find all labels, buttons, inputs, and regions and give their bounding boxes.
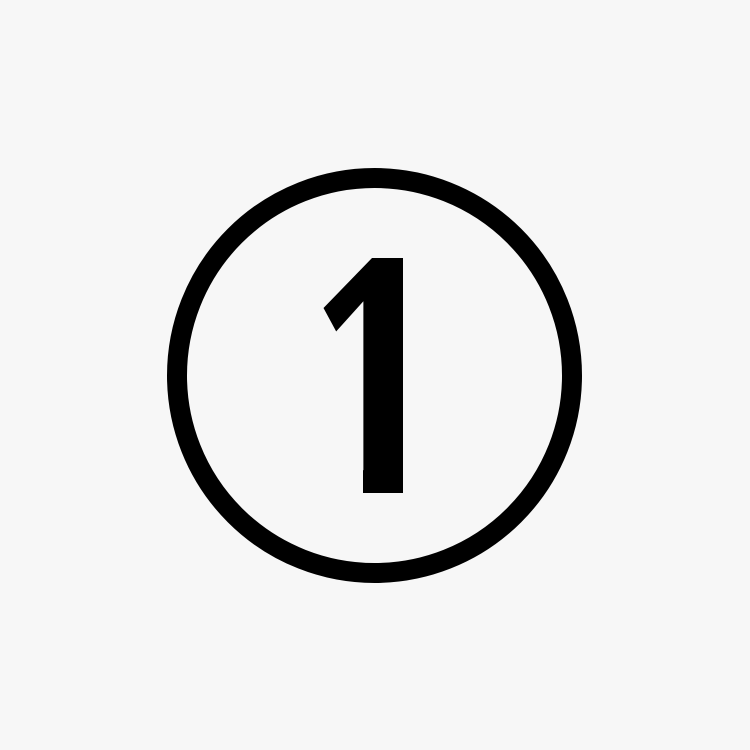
circle outline xyxy=(177,178,572,573)
numbered badge icon xyxy=(167,168,582,583)
numeral 1: 1 xyxy=(294,149,459,608)
